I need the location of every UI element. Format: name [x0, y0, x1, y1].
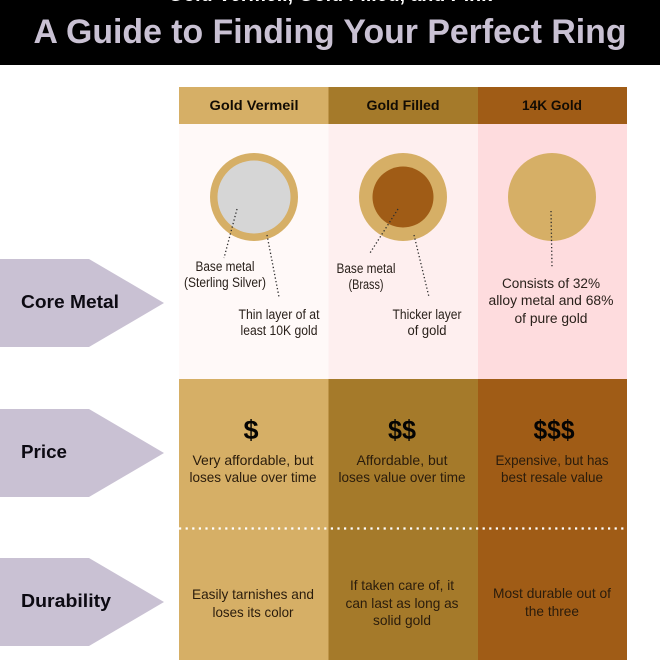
- row label: price: [0, 409, 164, 497]
- column: 14K gold price and durability: best resale value: [501, 469, 603, 485]
- row label: price: Price: [21, 441, 67, 462]
- price symbol: $: [243, 415, 259, 445]
- price text: Very affordable, but: [192, 452, 314, 468]
- row label: core metal: Core Metal: [21, 291, 119, 312]
- column: gold vermeil price and durability: loses its color: [212, 604, 294, 620]
- price text: Expensive, but has: [496, 452, 608, 468]
- description: Consists of 32%: [502, 276, 600, 291]
- durability text: Easily tarnishes and: [192, 586, 314, 602]
- label: base metal: Base metal: [196, 259, 254, 274]
- panel: core metal, gold filled: of gold: [408, 323, 446, 338]
- panel: core metal, 14K gold: alloy metal and 68%: [488, 293, 614, 308]
- price symbol: $$: [388, 415, 416, 445]
- header banner: [0, 0, 660, 65]
- column: gold filled price and durability: [328, 379, 478, 660]
- price text: Affordable, but: [356, 452, 448, 468]
- label: base metal: Base metal: [336, 261, 396, 276]
- durability text: Most durable out of: [493, 585, 611, 601]
- panel: core metal, gold vermeil: [179, 124, 328, 379]
- durability text: If taken care of, it: [350, 577, 454, 593]
- panel: core metal, gold filled: [328, 124, 478, 379]
- price symbol: $$$: [534, 415, 574, 445]
- panel: core metal, gold vermeil: least 10K gold: [240, 323, 318, 338]
- column: 14K gold price and durability: [478, 379, 627, 660]
- row label: durability: [0, 558, 164, 646]
- column: gold filled price and durability: can last as long as: [346, 595, 458, 611]
- icon: solid gold circle: [508, 153, 596, 241]
- column: gold filled price and durability: loses value over time: [338, 469, 466, 485]
- column headers: Gold Vermeil: [210, 97, 298, 113]
- icon: gold filled cross section: [359, 153, 447, 241]
- row label: core metal: [0, 259, 164, 347]
- column: gold filled price and durability: solid gold: [373, 612, 431, 628]
- panel: core metal, 14K gold: of pure gold: [514, 311, 588, 326]
- panel: core metal, gold vermeil: (Sterling Silver): [184, 275, 266, 290]
- column headers: [179, 87, 627, 124]
- icon: vermeil cross section: [210, 153, 298, 241]
- column headers: 14K Gold: [522, 97, 582, 113]
- column: gold vermeil price and durability: loses value over time: [190, 469, 317, 485]
- column: 14K gold price and durability: the three: [525, 603, 579, 619]
- panel: core metal, 14K gold: [478, 124, 627, 379]
- row label: durability: Durability: [21, 590, 112, 611]
- label: thicker layer: Thicker layer: [392, 307, 462, 322]
- label: thin layer: Thin layer of at: [238, 307, 320, 322]
- title: A Guide to Finding Your Perfect Ring: [34, 13, 626, 51]
- column: gold vermeil price and durability: [179, 379, 328, 660]
- panel: core metal, gold filled: (Brass): [348, 277, 384, 292]
- column headers: Gold Filled: [366, 97, 440, 113]
